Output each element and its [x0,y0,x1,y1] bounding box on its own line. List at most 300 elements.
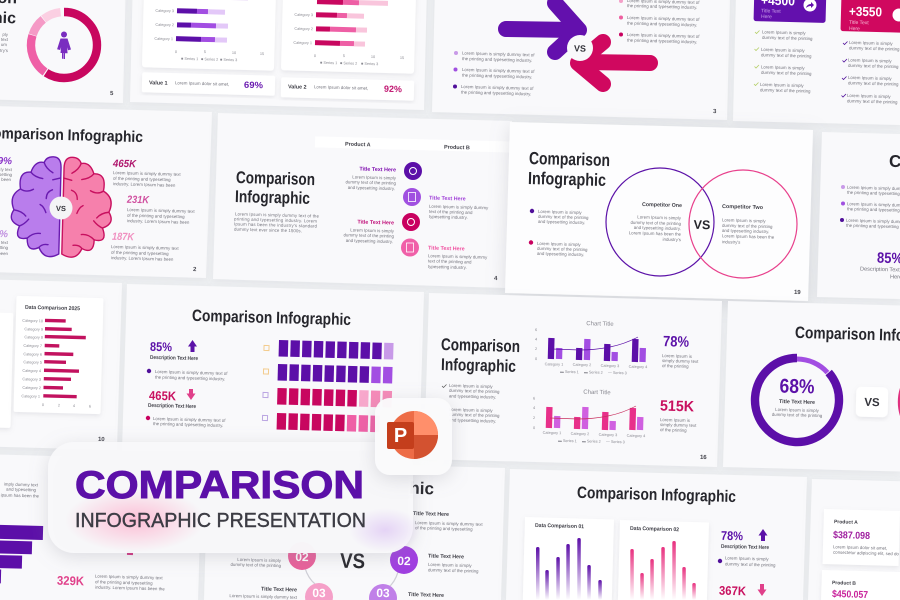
heading: slide 4 title: Comparison [236,168,315,189]
item 4 text: text of the printing and [428,258,472,265]
chart: pink combo: Chart Title [583,390,611,396]
chart: pink donut [18,0,110,91]
text: slide 4 description: Ipsum has been the industry's standard [234,221,318,229]
checklist left: dummy text of the printing [762,35,813,41]
bullets right: the printing and typesetting industry. [627,38,697,44]
axis labels [293,13,404,66]
right text: Title Text Here [428,554,464,560]
item 4 text: Lorem Ipsum is simply dummy [428,253,488,260]
competitor one: and typesetting industry. [634,225,681,231]
heading: title fragment: hic [409,479,434,498]
step 03 right: 03 [376,586,390,600]
stat 465K: industry. Lorem Ipsum has been [113,181,176,188]
chart: pink combo: Category 2 [571,432,589,436]
checklist left: dummy text of the printing [760,87,811,94]
stat 465K [148,389,196,410]
text fragment [1,482,40,499]
stat 78%: simply dummy text [662,358,699,364]
text fragment: and typesetting [6,487,37,492]
hero card [48,442,421,553]
card: data comparison 01 [523,517,614,600]
axis labels: ■ Series 1 [181,57,198,61]
stat 465K: 465K [149,389,176,403]
stat 465K [112,158,181,188]
heading: slide 19 title: Infographic [528,168,606,190]
bullet purple: Lorem Ipsum is simply dummy text of [155,369,228,376]
chart: purple combo: Category 3 [601,364,619,368]
text: slide 5 description: ply [2,32,9,37]
stat 187K: 187K [112,231,135,243]
panel: slide 19 venn [505,122,813,301]
step 03 right [369,584,397,600]
competitor two: dummy text of the printing [722,223,773,229]
axis labels: Category 7 [23,344,42,348]
axis labels: 0 [175,50,177,54]
bullet: dummy text of the printing [725,561,776,568]
axis labels: ■ Series 1 [320,61,337,65]
item 3 text [343,220,395,244]
card: value 2 [281,77,414,101]
axis labels: ■ Series 3 [220,58,237,62]
axis labels: 2 [58,403,60,408]
axis labels: Category 6 [23,352,42,357]
text: slide 4 description: printing and typesetting industry. Lorem [234,216,317,224]
axis labels: Category 3 [22,377,41,382]
stat 465K: Description Text Here [148,403,196,410]
card: value 2: Value 2 [288,84,307,91]
text: slide 4 description: Lorem Ipsum is simply dummy text of the [235,211,320,219]
axis labels: 10 [232,51,236,55]
card: data comparison 2025: Data Comparison 2025 [25,305,80,312]
chart: pink combo: 2 [533,416,535,420]
chart: purple combo: Chart Title [586,321,614,328]
stat 85%: Description Text Here [150,355,198,362]
bullet 2: Lorem Ipsum is simply [537,241,582,247]
panel: slide bottom right products [808,479,900,600]
card: value 2: 92% [384,84,402,94]
card: product b [821,570,900,600]
card: data comparison 2025 [13,296,104,414]
panel: slide right middle [817,132,900,299]
card: value 2: Lorem Ipsum dolor sit amet, [314,84,368,91]
card: data comparison 02: Data Comparison 02 [630,526,679,533]
checklist: Lorem Ipsum is simply [449,407,494,413]
bullets: the printing and typesetting [846,223,899,229]
step 02 left [288,542,316,570]
stat 78% [721,529,769,551]
heading: slide 4 title [235,168,315,208]
axis labels: Category 4 [22,369,41,373]
competitor two: Lorem Ipsum has been the [722,233,775,240]
chart: purple combo: ▬ Series 1 [560,370,579,374]
page number 10: 10 [98,437,105,443]
right text: Lorem Ipsum is simply [428,562,473,568]
stat 367K [719,584,766,598]
stacked bars pink [315,0,388,47]
competitor one: Competitor One [642,202,682,209]
icon circle 2 [403,188,421,206]
bullets left: Lorem Ipsum is simply dummy text of [462,67,535,74]
card: value 1: 69% [244,80,263,90]
right text: Title Text Here [413,511,449,518]
checklist right: dummy text of the printing [848,80,899,87]
bullets right: the printing and typesetting industry. [627,21,697,27]
item 1 text [345,167,397,191]
page number 2: 2 [193,267,197,273]
stat 78%: 78% [721,529,743,543]
right text: dummy text of the printing [428,567,479,574]
axis labels: Category 9 [24,327,43,332]
text: slide 5 description: try's [0,48,9,53]
stat 78% [662,333,699,369]
stat 78%: of the printing [662,363,689,369]
vs badge: VS [574,43,586,54]
axis labels: Category 2 [22,386,41,390]
stat 515K: 515K [660,398,694,415]
checklist right: Lorem Ipsum is simply [848,75,893,81]
item 4 text: Title Text Here [428,246,465,252]
checklist: and typesetting industry. [449,417,496,424]
step 03 left: 03 [312,586,326,600]
stat 465K: 465K [112,158,137,170]
stat 85%: Description Text [860,266,900,274]
vs badge: VS [56,204,66,213]
axis labels: 0 [42,403,44,407]
checklist: and typesetting industry. [449,393,496,400]
axis labels: Category 8 [24,335,43,340]
checklist right: dummy text of the printing [847,98,898,105]
chart: pink combo: ▬ Series 2 [582,439,601,444]
bullet 2: and typesetting industry. [537,251,584,257]
chart: pink combo: Category 1 [543,431,561,435]
checklist left [754,29,813,94]
checklist: Lorem Ipsum is simply [449,383,494,389]
chart: pink combo [533,390,645,444]
bullet 1: Lorem Ipsum is simply [538,209,583,215]
item 1 text: Title Text Here [359,167,396,173]
bullet pink [146,416,226,428]
chart: pink combo: 0 [533,426,535,430]
panel: slide 16 charts [424,293,722,467]
stat 231K: 231K [126,194,150,206]
heading: comparison: COMPARISON [75,464,364,507]
bullets right: Lorem Ipsum is simply dummy text of [627,15,700,22]
item 2 text: typesetting industry. [429,214,468,220]
vs card: VS [864,397,880,409]
checklist right: Lorem Ipsum is simply [848,57,893,64]
checklist right [842,40,900,105]
card: pink stat: Here [849,26,860,32]
stat left fragments: ly text [0,167,13,172]
chart: purple combo: — Series 3 [608,371,627,375]
item 1 text: dummy text of the printing [345,179,397,186]
card: bar chart purple [142,0,276,71]
checklist left: Lorem Ipsum is simply [761,64,806,71]
chart: pink combo: Category 4 [627,434,645,438]
stat 515K [660,398,697,433]
bullets left: Lorem Ipsum is simply dummy text of [462,51,535,57]
axis labels: 4 [73,404,75,408]
text: slide 4 description [234,211,320,233]
stat left fragments [0,156,13,256]
connectors [305,568,398,588]
card: product b: Product B [832,580,856,587]
stat 85% [150,340,198,362]
page number 3: 3 [713,109,717,115]
page number 5: 5 [110,91,114,97]
small arrow fragment [127,551,133,555]
checklist [442,383,500,424]
stat 187K: of the printing and typesetting [111,250,169,256]
arrow: pink left [578,42,650,84]
stat 515K: of the printing [660,427,687,433]
arrow: purple right [506,3,579,52]
stacked bars purple [176,8,228,43]
bullet [718,555,776,568]
axis labels: 15 [260,52,264,56]
right text: Lorem Ipsum is simply dummy text [415,520,483,527]
card: value 1: Value 1 [149,80,168,87]
stat 231K [126,194,195,225]
text: slide 4 description: dummy text ever since the 1500s. [234,227,302,233]
horizontal bars [43,319,86,398]
page number 16: 16 [700,455,707,461]
bullets left: the printing and typesetting industry. [461,90,531,96]
checklist left: Lorem Ipsum is simply [761,47,806,53]
square pictogram rows [277,340,394,432]
panel: slide 2 brain [0,104,212,278]
item 3 text: Title Text Here [357,220,394,226]
donut label [772,376,823,418]
vs badge [50,196,72,220]
icon: brain [10,156,113,258]
panel: slide 3 arrows [432,0,731,120]
icon circle 1 [404,162,422,180]
table header band [315,136,515,153]
stat 367K: 367K [719,584,746,598]
item 1 text: Lorem Ipsum is simply [352,174,397,181]
bullet purple: the printing and typesetting industry. [155,375,225,381]
panel: slide bottom middle vs [204,460,505,600]
stat left fragments: text [1,240,9,245]
bullets right: Lorem Ipsum is simply dummy text of [627,32,700,39]
violet glow [349,508,421,552]
axis labels: Category 3 [294,13,313,17]
icon circle 3 [402,213,420,231]
checklist right: dummy text of the printing [849,45,900,52]
stat 187K: industry. Lorem Ipsum has been [111,255,174,262]
item 3 text: Lorem Ipsum is simply [350,227,395,234]
stat 515K: simply dummy text [660,422,697,428]
card: product a: Lorem Ipsum dolor sit amet, [833,544,887,551]
left text: Title Text Here [261,587,297,593]
axis labels: 6 [89,404,91,409]
stat 78%: Description Text Here [721,544,769,551]
bullets: the printing and typesetting [847,190,900,196]
text: slide 5 description: text [1,37,9,42]
heading: slide 16 title [441,335,520,376]
heading: slide 4 title: Infographic [235,187,310,208]
stat 231K: industry. Lorem Ipsum has been [127,218,190,225]
card: pink stat: Title Text [849,20,869,26]
panel: slide bottom data comparison [506,469,807,600]
stat 329K: Lorem Ipsum is simply dummy text [95,574,163,580]
left text: Lorem Ipsum is simply [237,557,282,563]
bullet purple [147,369,228,381]
panel: slide 4 product comparison [213,113,515,288]
checklist left: Lorem Ipsum is simply [760,82,805,88]
checklist left: Lorem Ipsum is simply [762,29,807,36]
card: product a [822,509,900,566]
axis labels: Category 3 [155,9,174,13]
bullets left: Lorem Ipsum is simply dummy text of [461,84,534,91]
right text: Title Text Here [408,592,444,599]
panel: slide bars [130,0,428,110]
panel: slide 68% donut [723,301,900,472]
bullet 1: dummy text of the printing [538,214,589,220]
donut label: Lorem Ipsum is simply [775,407,820,413]
stat 329K: 329K [57,574,84,588]
bullet pink: the printing and typesetting industry. [153,421,223,428]
step 03 left [305,583,333,600]
chart: purple combo: 0 [535,357,537,361]
page number 19: 19 [794,290,801,296]
axis labels: 10 [371,55,375,59]
stat 78%: Lorem Ipsum is [662,353,693,359]
axis labels: 5 [204,50,206,54]
pink glow [65,488,205,552]
competitor one: dummy text of the printing [630,220,682,226]
card: partial left chart [0,311,13,428]
vs label: VS [340,550,365,573]
step 02 right: 02 [397,554,411,568]
axis labels: Category 1 [293,41,312,45]
axis labels: Category 5 [23,360,42,365]
bullets: the printing and typesetting [847,206,900,213]
text: slide 5 description: um [1,42,7,47]
card: value 1 [142,72,275,96]
donut label: Title Text Here [779,399,815,406]
left text [229,557,298,600]
checklist: dummy text of the printing [449,388,500,394]
stat left fragments: been [1,177,12,182]
heading: slide 19 title: Comparison [529,148,610,170]
text fragment: imply dummy text [4,482,39,487]
icon: person [57,32,71,59]
card: bar chart pink [281,0,416,74]
chart: purple donut [738,341,856,459]
item 2 text [429,196,489,220]
bullets right: the printing and typesetting industry. [627,3,697,10]
competitor two [722,204,775,245]
card: purple stat: Here [761,14,772,20]
item 3 text: dummy text of the printing [343,232,395,239]
table header band: Product B [444,145,470,151]
item 1 text: and typesetting industry. [348,185,395,191]
heading: slide 16 title: Comparison [441,335,520,356]
left text: Lorem Ipsum is simply dummy text [229,593,298,600]
card: data comparison 01: Data Comparison 01 [535,523,584,530]
checklist: dummy text of the printing [449,412,500,418]
left text: dummy text of the printing [230,562,282,568]
axis labels [21,319,91,409]
item 4 text [428,246,488,270]
axis labels: 5 [343,54,345,58]
donut label: 68% [779,376,815,398]
stat 465K: Lorem Ipsum is simply dummy text [113,170,181,177]
checklist right: dummy text of the printing [848,63,899,69]
right text: of the printing and typesetting [415,525,473,532]
stat 231K: Lorem Ipsum is simply dummy text [127,207,195,214]
axis labels: Category 2 [294,27,313,31]
competitor one: Lorem Ipsum has been the [629,230,682,237]
chart: pink combo: — Series 3 [606,440,625,444]
icon circle 4 [401,238,419,256]
venn circles [606,168,797,278]
axis labels: Category 2 [155,23,174,27]
axis labels: Category 1 [154,37,173,41]
panel: slide top right stats [733,0,900,125]
competitor two: Lorem Ipsum is simply [722,217,767,224]
bullet pink: Lorem Ipsum is simply dummy text of [153,416,226,423]
stat 187K: Lorem Ipsum is simply dummy text [111,244,179,251]
chart: funnel bars [0,524,43,583]
chart: purple combo: Category 1 [545,362,563,367]
stat 85% [860,250,900,281]
icons row [262,345,269,421]
chart: purple combo: ▬ Series 2 [584,370,603,375]
chart: purple combo [535,321,647,375]
vs card [856,387,888,417]
checklist left: dummy text of the printing [761,52,812,59]
chart: pink combo: 4 [533,406,535,410]
competitor one: industry's [663,237,682,242]
chart: purple combo: 2 [535,347,537,351]
axis labels: ■ Series 2 [340,61,357,66]
card: product a: consectetur adipiscing elit, sed do [833,550,900,556]
vs label: VS [693,218,711,232]
axis labels: Category 10 [22,319,43,323]
stat 515K: Lorem Ipsum is [660,417,691,423]
subheading: infographic presentation: INFOGRAPHIC PRESENTATION [75,509,366,532]
axis labels: 0 [314,54,316,58]
axis labels: ■ Series 2 [201,57,218,62]
competitor two: Competitor Two [722,204,764,211]
right text [408,511,483,599]
chart: purple combo: Category 2 [573,363,591,367]
stat 465K: of the printing and typesetting [113,176,171,182]
panel: slide 10 [0,275,122,450]
step 02 left: 02 [295,550,309,564]
text fragment: ipsum has been the [1,492,40,499]
heading: title: Comparison Infographic [577,484,736,506]
card: value 1: Lorem Ipsum dolor sit amet, [175,80,229,87]
card: product a: Product A [834,519,858,526]
powerpoint badge [375,398,452,475]
bullet 1 [530,209,589,225]
chart: pink combo: ▬ Series 1 [558,439,577,443]
chart: purple combo: 6 [535,328,537,332]
stat 329K: of the printing and typesetting [95,579,153,586]
chart: pink combo: Category 3 [599,433,617,437]
stat 187K [111,231,179,262]
bullets right [619,0,700,44]
card: product a: $387.098 [833,530,871,542]
checklist left: dummy text of the printing [761,70,812,76]
panel: slide middle squares [122,284,424,459]
heading: slide 19 title [528,148,610,190]
gradient bars pink [630,541,696,600]
